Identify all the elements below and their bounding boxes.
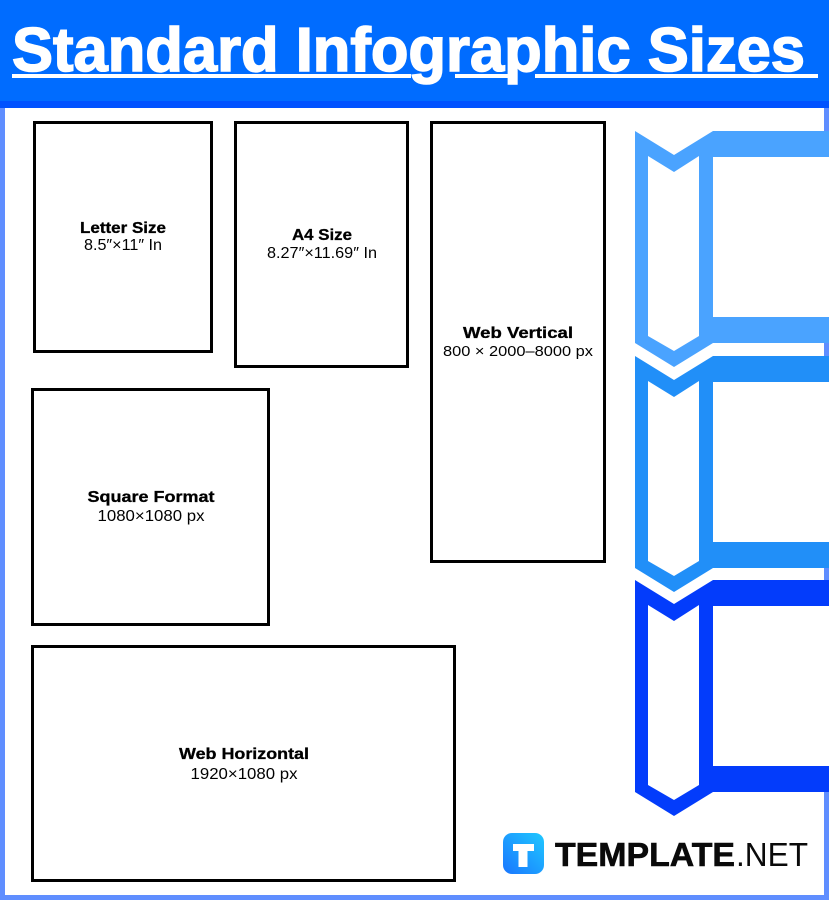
panel: Square Format: Square Format	[88, 489, 214, 506]
logo wordmark: TEMPLATE	[555, 836, 735, 873]
panel: Square Format: 1080×1080 px	[98, 508, 205, 525]
panel: Letter Size: 8.5″×11″ In	[84, 237, 162, 254]
chevron frame: dark blue	[635, 580, 829, 816]
panel: Square Format	[32, 390, 268, 624]
panel: A4 Size: 8.27″×11.69″ In	[267, 245, 377, 262]
logo wordmark	[555, 836, 808, 873]
header banner	[0, 0, 829, 108]
panel: Web Horizontal: Web Horizontal	[179, 746, 309, 763]
logo wordmark: .NET	[736, 836, 808, 873]
panel: Web Vertical: 800 × 2000–8000 px	[443, 344, 594, 360]
panel: Letter Size: Letter Size	[80, 220, 166, 237]
icon: T badge	[503, 833, 544, 874]
chevron frame: light blue	[635, 131, 829, 367]
panel: Web Horizontal: 1920×1080 px	[190, 766, 298, 783]
panel: A4 Size	[236, 122, 408, 366]
panel: Web Vertical: Web Vertical	[463, 325, 573, 342]
title: Standard Infographic Sizes	[12, 16, 805, 85]
panel: Letter Size	[34, 122, 212, 352]
panel: Web Horizontal	[32, 646, 454, 880]
logo: Template.net	[503, 833, 808, 874]
chevron frame: medium blue	[635, 356, 829, 592]
panel: Web Vertical	[432, 122, 604, 562]
panel: A4 Size: A4 Size	[292, 227, 352, 244]
